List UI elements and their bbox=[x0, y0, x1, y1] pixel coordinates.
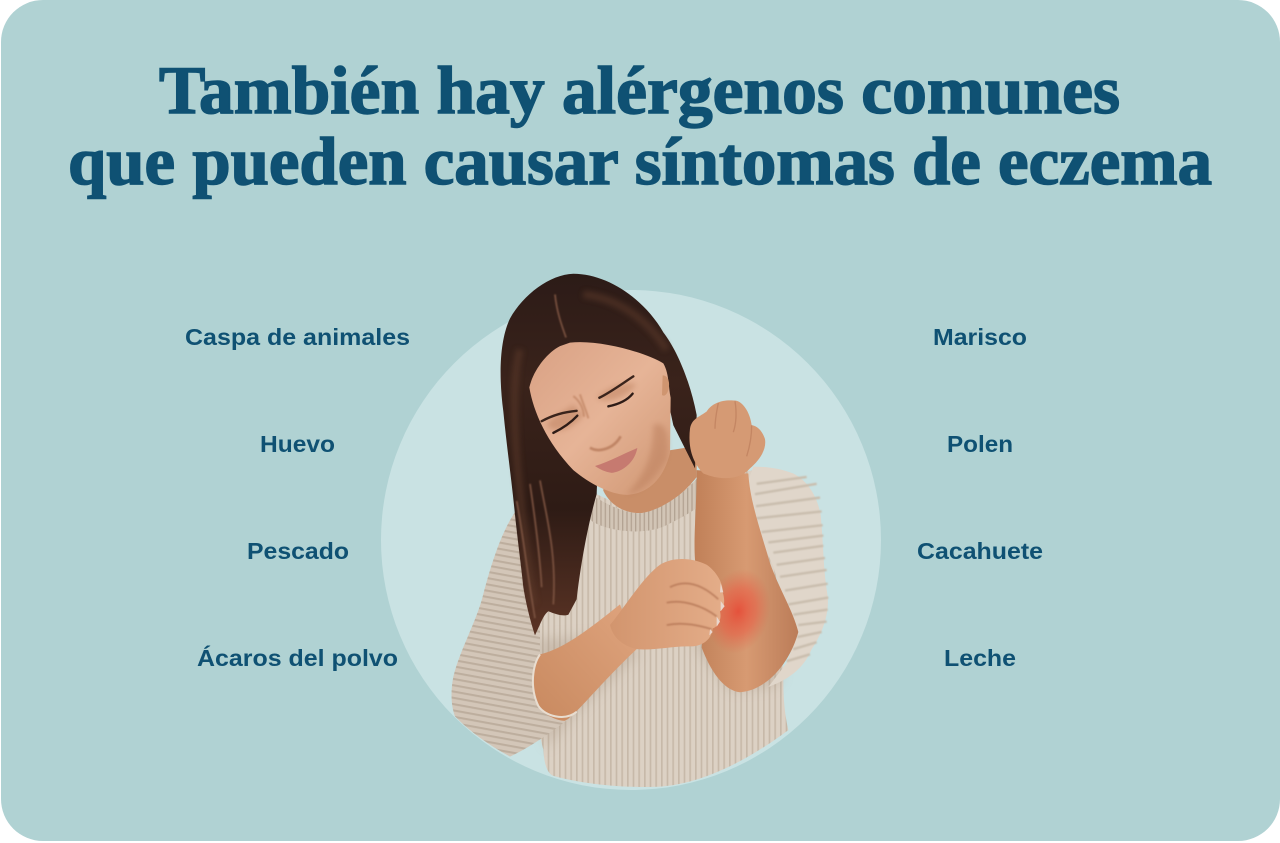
sweater torso bbox=[514, 470, 788, 787]
hair back bbox=[501, 274, 697, 635]
hair highlights bbox=[517, 294, 566, 618]
label: Pescado: Pescado bbox=[247, 538, 349, 564]
sweater cuff edge bbox=[533, 654, 577, 717]
finger creases bbox=[667, 583, 718, 629]
eyebrows bbox=[542, 376, 633, 421]
sweater shadow under arms bbox=[537, 563, 783, 749]
closed eyes bbox=[553, 394, 633, 433]
label: Leche: Leche bbox=[944, 645, 1016, 671]
forehead wrinkles bbox=[573, 394, 588, 418]
illustration: woman scratching her arm bbox=[452, 274, 828, 787]
title bbox=[68, 52, 1212, 199]
label: Cacahuete: Cacahuete bbox=[917, 538, 1043, 564]
sleeve knit lines bbox=[755, 477, 828, 661]
nose bbox=[590, 436, 621, 450]
mouth bbox=[595, 448, 637, 473]
ear bbox=[662, 375, 669, 396]
face bbox=[529, 342, 671, 495]
hair shading bbox=[514, 294, 667, 604]
sweater collar bbox=[588, 479, 697, 531]
neck bbox=[603, 446, 697, 513]
label: Huevo: Huevo bbox=[260, 431, 335, 457]
label: Polen: Polen bbox=[947, 431, 1013, 457]
palm and fingers bbox=[610, 559, 724, 650]
rash bbox=[697, 561, 780, 661]
right allergen list bbox=[917, 324, 1043, 671]
left allergen list bbox=[185, 324, 410, 671]
left forearm bbox=[533, 604, 637, 721]
sweater left sleeve bbox=[452, 510, 577, 757]
fist bbox=[689, 400, 765, 478]
background circle bbox=[381, 290, 881, 790]
sweater right sleeve bbox=[748, 467, 828, 687]
title: También hay alérgenos comunes bbox=[159, 52, 1120, 128]
fist knuckle creases bbox=[715, 401, 752, 456]
title: que pueden causar síntomas de eczema bbox=[68, 123, 1212, 199]
label: Ácaros del polvo: Ácaros del polvo bbox=[197, 644, 398, 671]
raised forearm bbox=[695, 470, 798, 692]
nails bbox=[709, 583, 725, 635]
label: Caspa de animales: Caspa de animales bbox=[185, 324, 410, 350]
scratching hand bbox=[610, 559, 725, 650]
facial shading bbox=[547, 383, 668, 494]
label: Marisco: Marisco bbox=[933, 324, 1027, 350]
